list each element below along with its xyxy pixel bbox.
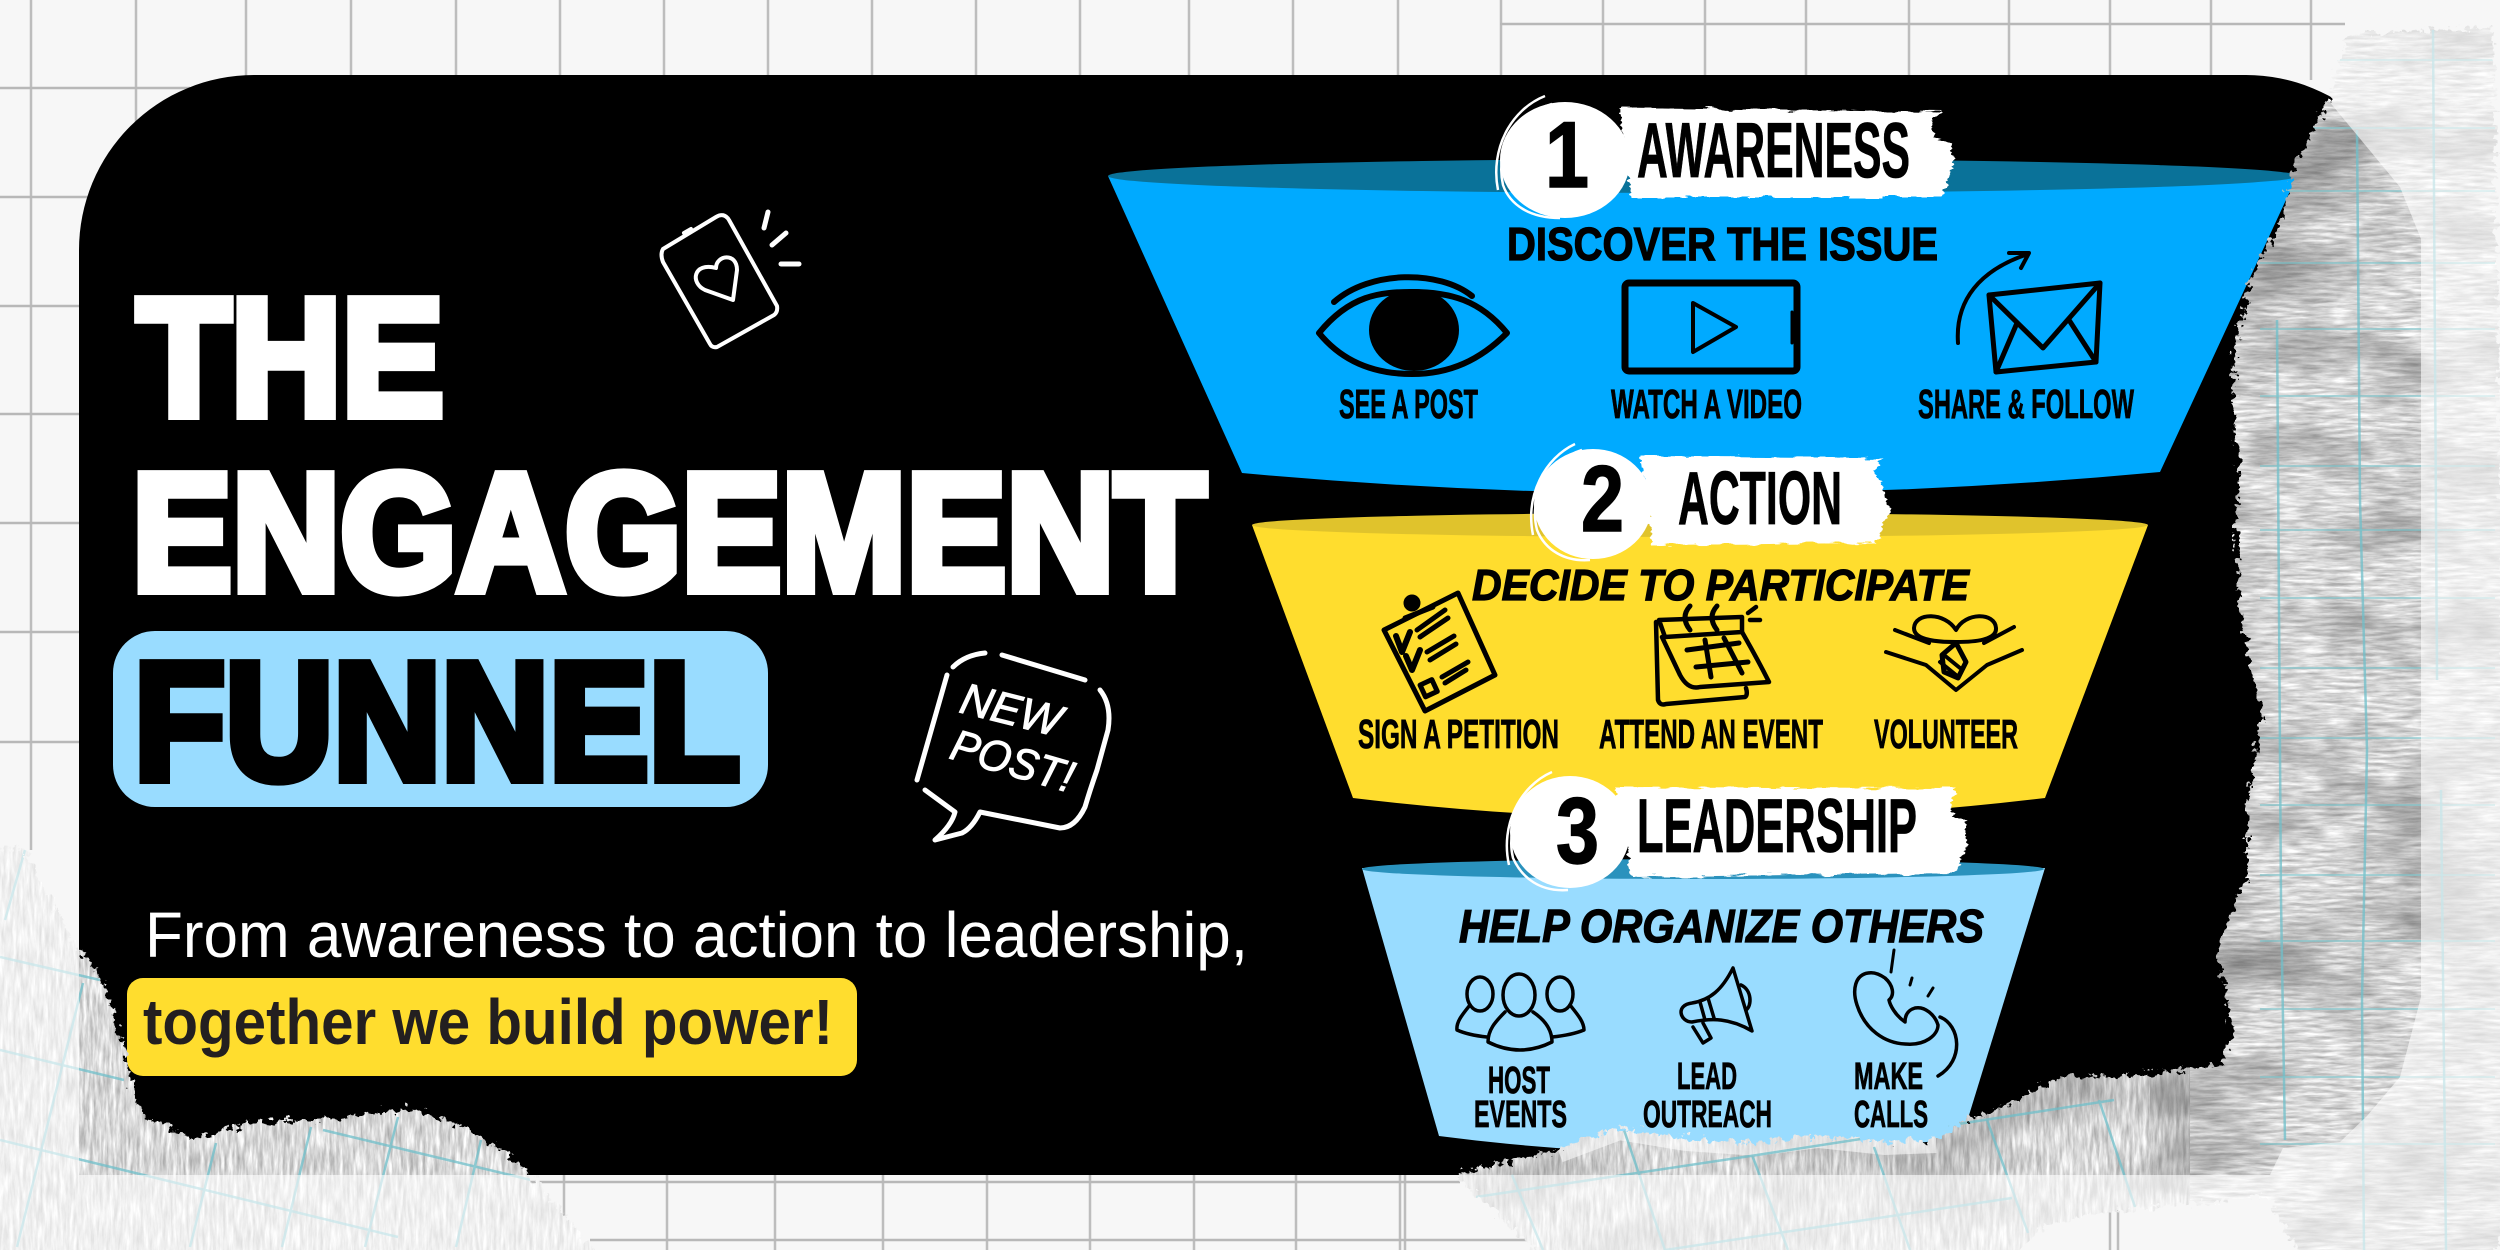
label: host events (1474, 1060, 1567, 1136)
label: host events: EVENTS (1474, 1094, 1567, 1136)
number circle (1507, 772, 1630, 890)
stage title: ACTION (1678, 456, 1842, 540)
icon: volunteer hands and heart (1886, 616, 2022, 690)
number circle (1531, 444, 1652, 560)
label: make calls: MAKE (1854, 1056, 1923, 1098)
label: SIGN A PETITION (1358, 711, 1559, 757)
number: 1 (1545, 102, 1589, 207)
funnel section 1: awareness (1108, 159, 2298, 494)
callout: together we build power (127, 978, 857, 1076)
title line: THE: THE (137, 265, 444, 451)
heading: DECIDE TO PARTICIPATE (1472, 561, 1971, 610)
stage title: LEADERSHIP (1637, 784, 1917, 869)
label: lead outreach: LEAD (1677, 1056, 1737, 1098)
torn paper: right and bottom (1458, 25, 2500, 1250)
stage title: AWARENESS (1637, 106, 1910, 194)
heading: HELP ORGANIZE OTHERS (1459, 900, 1984, 952)
subtitle: From awareness to action to leadership, (145, 899, 1248, 971)
badge 1: awareness (1496, 96, 1954, 218)
brush stroke (1620, 108, 1954, 197)
icon: people (1457, 974, 1584, 1050)
label: VOLUNTEER (1874, 711, 2018, 757)
bubble text (945, 674, 1080, 802)
brush stroke (1640, 456, 1889, 545)
funnel body yellow (1252, 525, 2148, 819)
label: lead outreach (1643, 1056, 1772, 1136)
icon: calendar (1656, 606, 1769, 704)
bubble text: POST! (945, 721, 1080, 802)
icon: megaphone (1681, 968, 1752, 1043)
icon: speech bubble NEW POST (917, 653, 1109, 840)
number: 2 (1581, 446, 1624, 551)
torn paper: bottom left (0, 845, 592, 1250)
label: make calls (1854, 1056, 1928, 1136)
number circle (1496, 96, 1630, 218)
icon: phone with heart (662, 212, 799, 347)
badge 3: leadership (1507, 772, 1968, 890)
funnel section 2: action (1252, 513, 2148, 819)
bubble text: NEW (956, 674, 1070, 747)
callout: together we build power: together we build power! (143, 986, 833, 1058)
funnel rim light blue (1362, 859, 2044, 879)
icon: eye (1319, 277, 1507, 374)
title line: ENGAGEMENT: ENGAGEMENT (132, 440, 1206, 626)
label: ATTEND AN EVENT (1599, 711, 1823, 757)
number: 3 (1556, 778, 1599, 883)
funnel body blue (1108, 174, 2298, 494)
icon: phone call (1855, 950, 1957, 1076)
badge 2: action (1531, 444, 1889, 560)
icon: clipboard petition (1384, 593, 1495, 711)
title (113, 265, 1206, 815)
label: SHARE & FOLLOW (1918, 381, 2134, 427)
funnel rim yellow (1252, 513, 2148, 537)
funnel rim blue (1108, 159, 2298, 193)
icon: envelope with arrow (1958, 253, 2100, 372)
funnel section 3: leadership (1362, 859, 2045, 1154)
icon: video player (1625, 283, 1797, 371)
label: WATCH A VIDEO (1611, 381, 1802, 427)
label: host events: HOST (1488, 1060, 1550, 1102)
label: lead outreach: OUTREACH (1643, 1094, 1772, 1136)
brush stroke (1615, 787, 1968, 877)
highlighted pill: FUNNEL: FUNNEL (134, 629, 740, 815)
funnel body light blue (1362, 868, 2045, 1154)
label: SEE A POST (1339, 381, 1478, 427)
label: make calls: CALLS (1854, 1094, 1928, 1136)
heading: DISCOVER THE ISSUE (1507, 218, 1938, 270)
